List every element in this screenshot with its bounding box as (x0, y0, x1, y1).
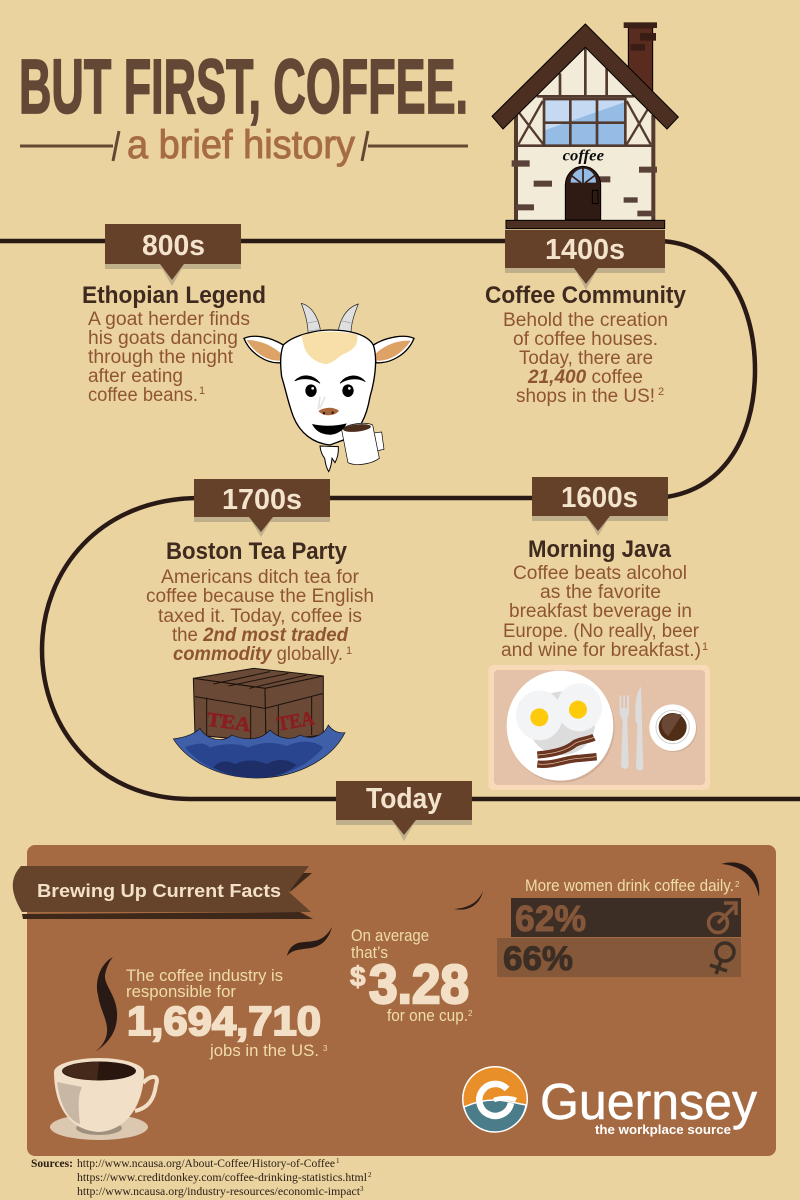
tag: 800s (105, 224, 241, 286)
sources: http://www.ncausa.org/industry-resources/economic-impact (77, 1186, 361, 1198)
block: Morning Java: as the favorite (540, 582, 661, 603)
plate (507, 671, 615, 783)
tag: Today: Today (366, 783, 442, 815)
stat: cost per cup (350, 927, 473, 1025)
sources: https://www.creditdonkey.com/coffee-drinking-statistics.html (77, 1172, 367, 1184)
head patch (301, 332, 357, 364)
logo: Guernsey: the workplace source (595, 1122, 731, 1137)
sources: Sources: (31, 1158, 73, 1170)
coffee sign: coffee (563, 148, 604, 165)
male bar: 62% (515, 898, 586, 939)
tag: 1700s: 1700s (222, 484, 302, 516)
tag: Today (336, 781, 472, 841)
window (544, 98, 625, 146)
icon: tea crate in water (173, 668, 345, 778)
TEA stencils: TEA (205, 708, 253, 736)
stat: gender (497, 877, 741, 978)
block: Coffee Community: 2 (658, 386, 664, 398)
stat: gender: More women drink coffee daily. (525, 877, 734, 895)
block: Coffee Community (485, 282, 687, 407)
TEA stencils (205, 707, 316, 736)
door (565, 166, 601, 220)
block: Morning Java: Coffee beats alcohol (513, 563, 687, 584)
block: Ethopian Legend: through the night (88, 347, 234, 368)
fried eggs (516, 683, 602, 740)
tag: 1400s (505, 230, 665, 290)
icon: goat with coffee mug (244, 303, 414, 472)
block: Morning Java: and wine for breakfast.) (501, 640, 701, 661)
nose (318, 397, 339, 415)
block: Ethopian Legend: coffee beans. (88, 385, 198, 406)
block: Ethopian Legend: Ethopian Legend (82, 282, 266, 309)
block: Coffee Community: Today, there are (519, 348, 653, 369)
stat: cost per cup: for one cup. (387, 1007, 468, 1025)
beard (320, 446, 338, 472)
coffee cup (649, 704, 697, 752)
block: Coffee Community: shops in the US! (516, 386, 655, 407)
block: Boston Tea Party: the 2nd most traded (172, 625, 348, 646)
block: Coffee Community: of coffee houses. (513, 329, 658, 350)
crate (193, 668, 323, 742)
eyes and brows (295, 376, 365, 397)
stat: cost per cup: that’s (351, 944, 388, 962)
block: Ethopian Legend: A goat herder finds (88, 309, 250, 330)
horns (301, 303, 358, 339)
stat: jobs (126, 967, 328, 1060)
panel: current facts (13, 845, 776, 1156)
female bar (497, 938, 741, 978)
TEA stencils: TEA (275, 707, 316, 736)
block: Boston Tea Party: 1 (346, 645, 352, 657)
block: Ethopian Legend: his goats dancing (88, 328, 238, 349)
roof (492, 24, 678, 129)
tag: 1600s: 1600s (561, 482, 638, 514)
mouth (312, 423, 347, 435)
block: Boston Tea Party: Americans ditch tea for (161, 567, 360, 588)
sources: 3 (360, 1185, 364, 1193)
tag: 800s: 800s (142, 230, 205, 262)
logo: Guernsey (462, 1066, 757, 1137)
fork (620, 695, 629, 769)
tag: 1700s (194, 479, 330, 537)
block: Morning Java: Europe. (No really, beer (503, 621, 700, 642)
block: Coffee Community: 21,400 coffee (527, 367, 643, 388)
stat: jobs: jobs in the US. (209, 1042, 319, 1060)
tag: 1600s (532, 477, 668, 536)
block: Ethopian Legend: after eating (88, 366, 183, 387)
stat: jobs: The coffee industry is (126, 967, 283, 985)
block: Coffee Community: Behold the creation (503, 310, 668, 331)
sources: http://www.ncausa.org/About-Coffee/History-of-Coffee (77, 1158, 335, 1170)
water (173, 725, 345, 778)
stat: jobs: 1,694,710 (127, 998, 321, 1044)
head (281, 330, 376, 445)
female bar: 66% (503, 940, 573, 978)
ribbon heading (13, 866, 313, 919)
stat: cost per cup: 2 (468, 1009, 473, 1018)
coffee cup (50, 1058, 157, 1140)
stat: cost per cup: 3.28 (369, 953, 469, 1015)
block: Ethopian Legend (82, 282, 266, 406)
block: Boston Tea Party: coffee because the English (146, 586, 374, 607)
block: Morning Java: 1 (702, 641, 708, 653)
block: Coffee Community: Coffee Community (485, 282, 687, 309)
knife (635, 687, 643, 770)
stat: jobs: 3 (323, 1044, 328, 1053)
subtitle: a brief history: a brief history (127, 123, 355, 167)
block: Boston Tea Party: taxed it. Today, coffee is (158, 606, 362, 627)
title: BUT FIRST, COFFEE. (19, 44, 468, 130)
stat: gender: 2 (735, 880, 740, 889)
block: Boston Tea Party: commodity globally. (173, 644, 343, 665)
bricks (512, 160, 657, 216)
stat: cost per cup: On average (351, 927, 429, 945)
tray (488, 665, 710, 790)
male bar (511, 898, 741, 939)
stat: jobs: responsible for (126, 983, 237, 1001)
tag: 1400s: 1400s (545, 234, 625, 266)
mug (342, 423, 384, 465)
block: Boston Tea Party: Boston Tea Party (166, 538, 348, 565)
block: Morning Java: breakfast beverage in (509, 601, 692, 622)
block: Morning Java (501, 536, 708, 661)
block: Boston Tea Party (146, 538, 374, 665)
sources (31, 1157, 372, 1198)
subtitle: a brief history (20, 123, 468, 167)
bacon (537, 737, 597, 764)
block: Morning Java: Morning Java (528, 536, 672, 563)
ribbon heading: Brewing Up Current Facts (37, 880, 281, 901)
icon: coffee house (492, 22, 678, 229)
chimney (624, 22, 657, 94)
logo: Guernsey: Guernsey (540, 1073, 757, 1130)
ears (244, 336, 414, 363)
icon: breakfast tray (488, 665, 710, 790)
sources: 1 (336, 1157, 340, 1165)
stat: cost per cup: $ (350, 961, 366, 992)
timeline path (0, 241, 800, 799)
upper walls (516, 42, 653, 222)
doorstep base (506, 220, 665, 229)
steam wisps (95, 862, 759, 1052)
block: Ethopian Legend: 1 (199, 385, 205, 397)
sources: 2 (368, 1171, 372, 1179)
